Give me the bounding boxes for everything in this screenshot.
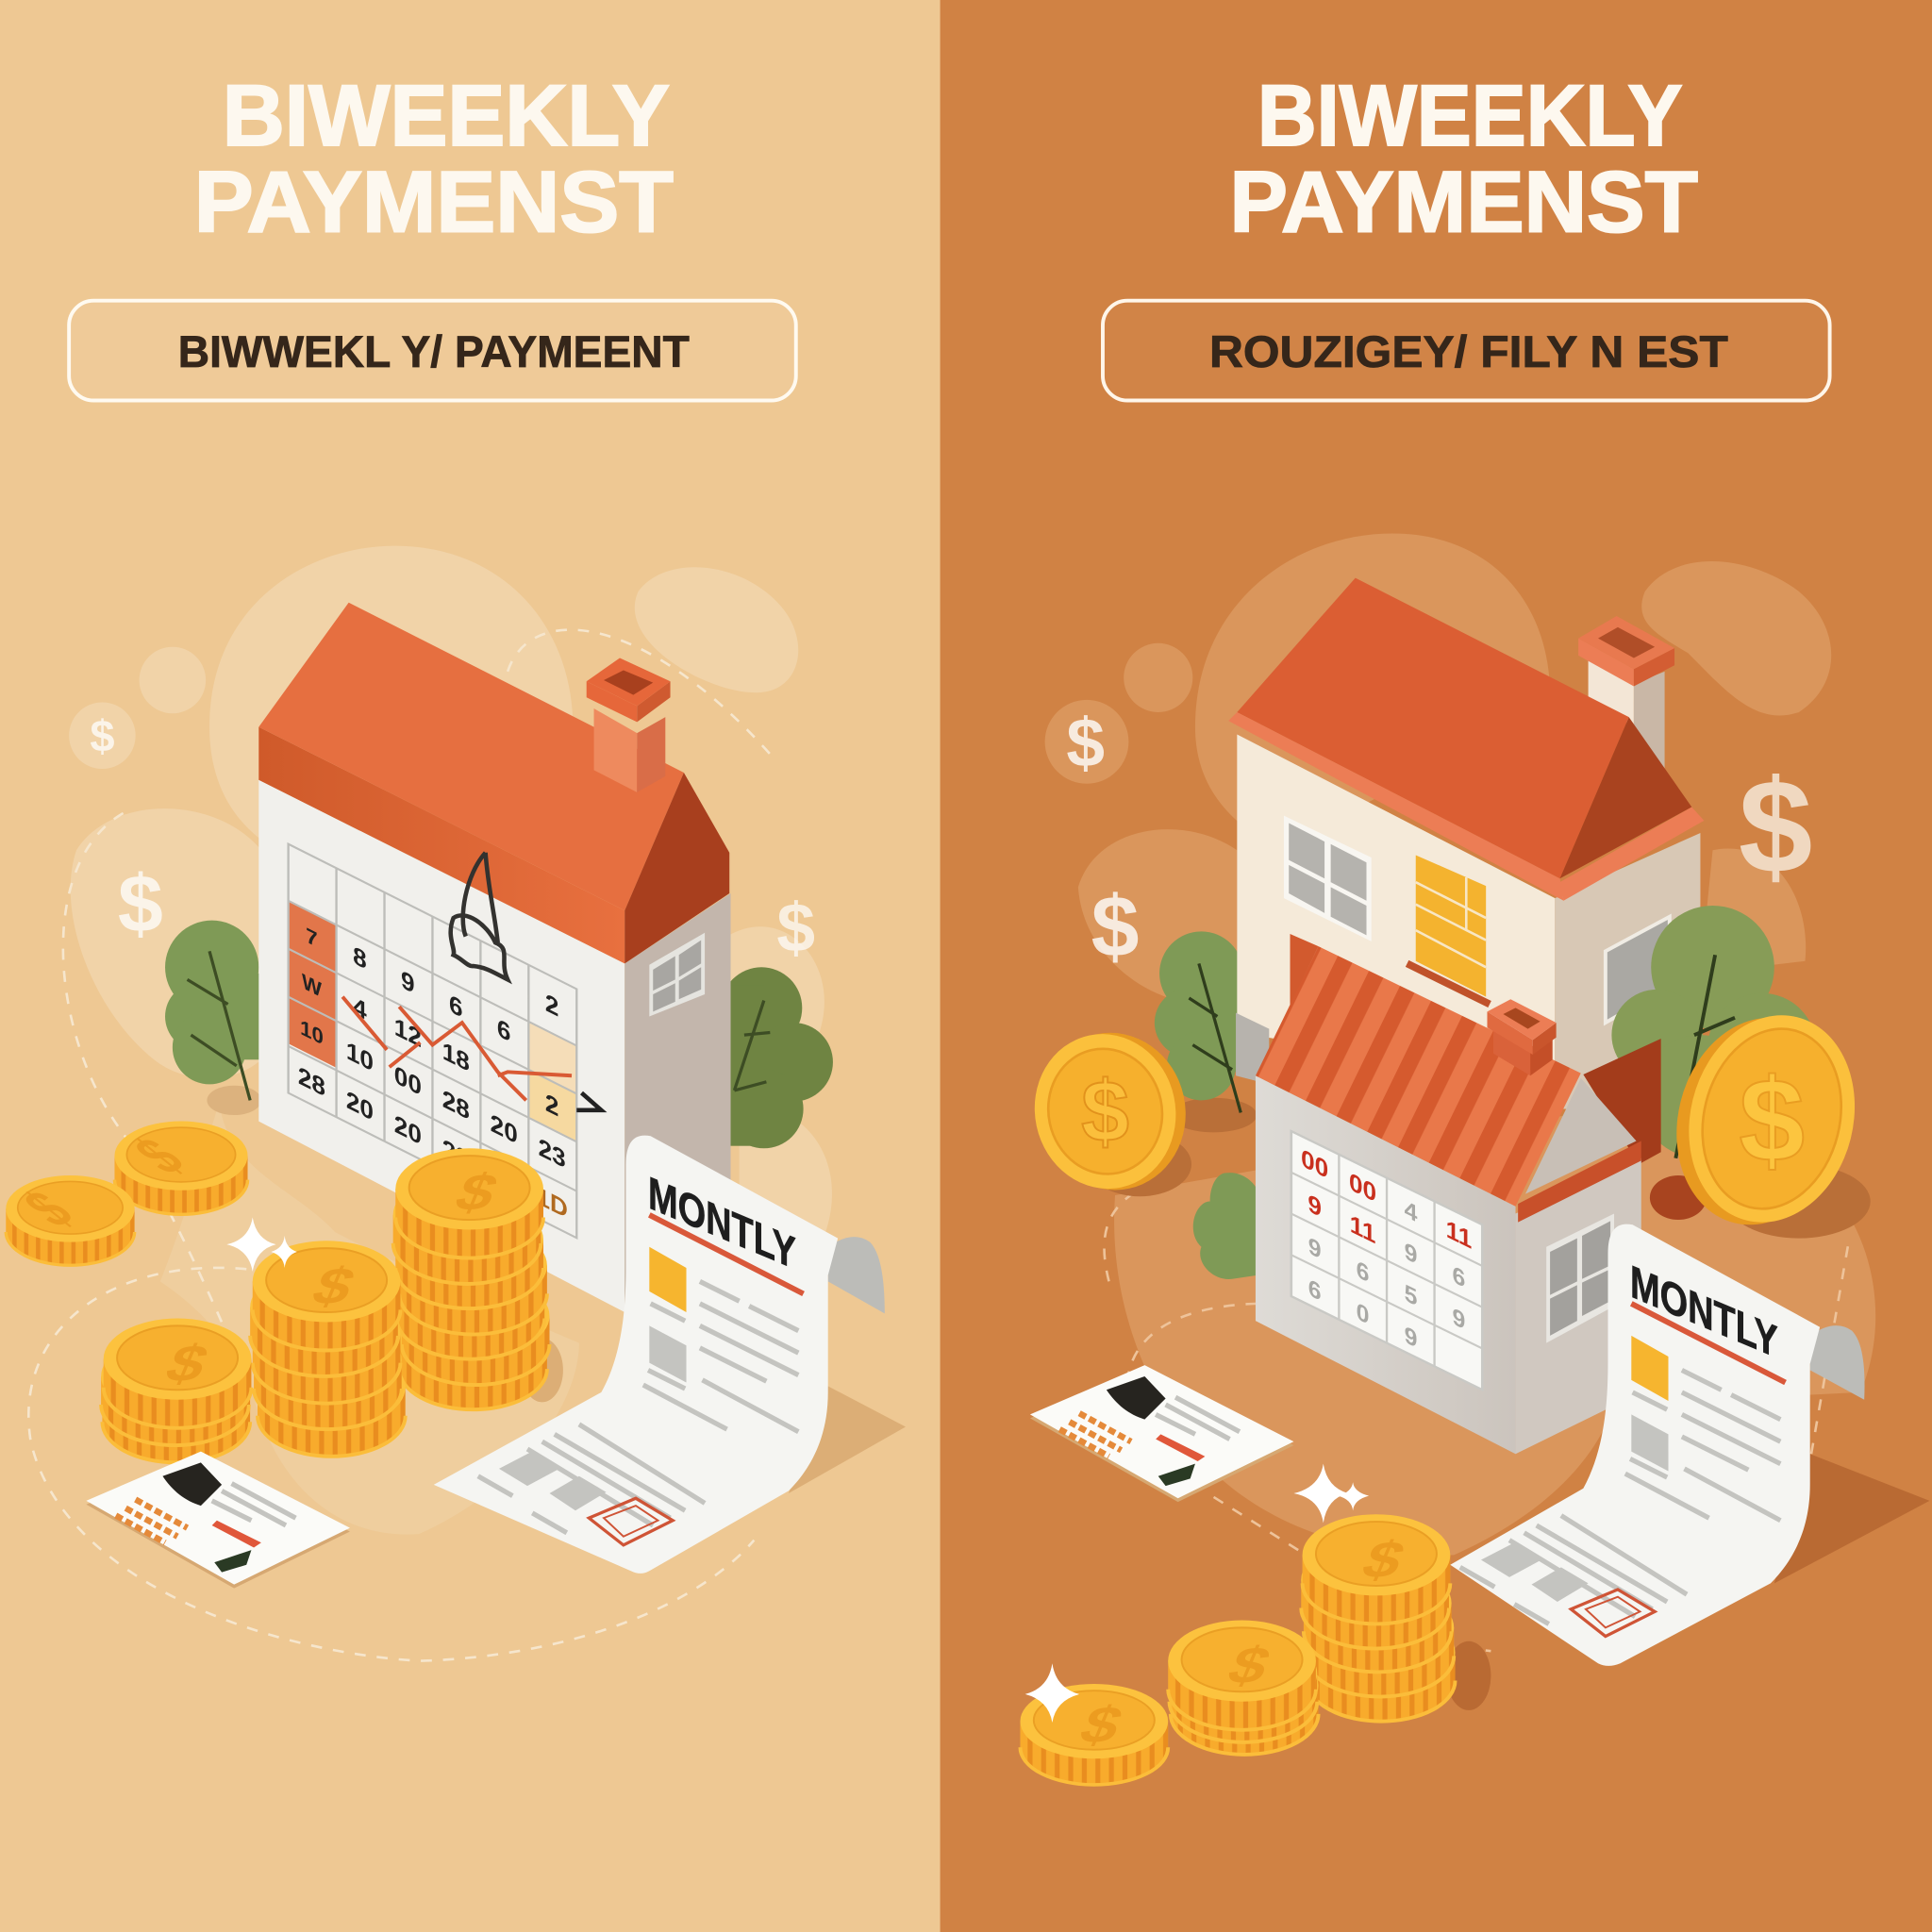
left tree: [165, 921, 261, 1115]
calendar grid: 6: [1357, 1255, 1369, 1288]
calendar grid: 11: [1350, 1209, 1375, 1249]
side window: [1606, 917, 1670, 1023]
label pill: BIWWEKL Y/ PAYMEENT: [178, 326, 690, 376]
calendar grid: 0: [1357, 1297, 1369, 1330]
calendar grid: 4: [1405, 1194, 1418, 1228]
coin stack medium: [250, 1241, 406, 1457]
standing coin left: $: [1081, 1063, 1129, 1159]
calendar grid: 9: [1405, 1237, 1417, 1270]
single coin left: [114, 1122, 248, 1215]
house walls: [1237, 734, 1555, 1084]
chimney: [1578, 616, 1674, 770]
calendar grid: 10: [346, 1036, 374, 1077]
calendar grid: 12: [394, 1012, 422, 1053]
coin stack short: $: [158, 1335, 217, 1392]
calendar grid: 2: [545, 988, 558, 1023]
lower calendar house: [1256, 934, 1661, 1454]
coin stack tall: [1301, 1514, 1456, 1723]
roof: [1228, 578, 1704, 901]
single coin left: $: [119, 1126, 199, 1185]
title: [1230, 68, 1698, 251]
icon: floating dollars: $: [1739, 752, 1812, 901]
calendar grid: 9: [1308, 1231, 1322, 1264]
coin shadows: [521, 1338, 563, 1402]
sparkles: [1025, 1464, 1369, 1723]
calendar grid: 9: [1307, 1189, 1322, 1223]
gable fascia: [1518, 1141, 1641, 1223]
standing coin right: $: [1739, 1053, 1805, 1186]
coin stack short: $: [1220, 1637, 1279, 1694]
calendar grid: 28: [442, 1084, 470, 1125]
panel: left biweekly: [0, 0, 941, 1932]
standing coin right: [1656, 997, 1876, 1242]
standing coin left: [1021, 1019, 1200, 1204]
right background blobs: [1045, 534, 1875, 1555]
roof: [258, 603, 729, 963]
single coin: [1020, 1684, 1168, 1786]
gable: [1525, 1078, 1637, 1194]
calendar grid: [1291, 1131, 1482, 1390]
left background blobs: [69, 546, 832, 1535]
arrow: [576, 1093, 601, 1110]
small tree: [1193, 1173, 1257, 1279]
title: BIWEEKLY: [223, 68, 670, 164]
side window: [649, 933, 705, 1017]
house walls: [258, 780, 625, 1312]
calendar grid: 23: [539, 1132, 566, 1174]
icon: floating dollars: $: [1066, 705, 1105, 781]
big tree: [1611, 906, 1816, 1158]
title: PAYMENST: [194, 155, 674, 251]
calendar grid: 1D: [536, 1180, 568, 1224]
single coin far left: [6, 1175, 135, 1266]
coin stack short: [1168, 1621, 1319, 1756]
small bill card: [1030, 1365, 1293, 1502]
calendar grid: 2: [545, 1088, 558, 1123]
calendar grid: 20: [346, 1085, 374, 1126]
calendar grid: 00: [394, 1059, 422, 1101]
red back wall: [1291, 934, 1319, 1010]
panel: right monthly: [941, 0, 1932, 1932]
small bill card: [86, 1452, 350, 1589]
coin stack tall: [393, 1148, 550, 1411]
calendar grid: 20: [394, 1109, 422, 1151]
label pill: ROUZIGEY/ FILY N EST: [1209, 326, 1728, 376]
coin stack short: [101, 1319, 251, 1464]
right dashed paths: [1105, 1189, 1848, 1657]
payment document: MONTLY: [1630, 1255, 1778, 1368]
calendar grid: 5: [1405, 1278, 1417, 1311]
striped roof: [1256, 946, 1581, 1207]
sparkles: [226, 1217, 297, 1272]
calendar grid: 23: [442, 1133, 470, 1174]
calendar grid: 8: [353, 941, 367, 975]
icon: floating dollars: [1066, 705, 1812, 975]
icon: floating dollars: $: [90, 711, 114, 761]
calendar grid: 00: [1301, 1143, 1328, 1184]
right background: [941, 0, 1932, 1932]
coin stack tall: $: [447, 1163, 507, 1222]
calendar grid: 6: [449, 989, 463, 1024]
title: PAYMENST: [1230, 155, 1698, 251]
calendar grid: 28: [298, 1060, 325, 1102]
calendar grid: 9: [401, 965, 415, 999]
calendar grid: 20: [491, 1108, 518, 1150]
calendar grid: W: [302, 969, 323, 1002]
trend line: [342, 997, 572, 1100]
left tree: [1155, 931, 1257, 1132]
calendar grid: 9: [1453, 1302, 1465, 1335]
payment document: [1450, 1224, 1929, 1666]
calendar grid: 10: [300, 1015, 324, 1050]
icon: floating dollars: $: [118, 858, 163, 949]
title: BIWEEKLY: [1257, 68, 1683, 164]
house walls: [1256, 1075, 1516, 1454]
icon: floating dollars: [90, 711, 815, 966]
calendar house: [258, 603, 731, 1312]
payment document: [434, 1136, 906, 1574]
icon: floating dollars: $: [1091, 879, 1139, 975]
upper house: [1228, 578, 1704, 1109]
yellow window: [1407, 855, 1490, 1004]
calendar grid: 4: [353, 991, 367, 1025]
bell hook: [451, 853, 508, 979]
label pill: [69, 301, 796, 400]
window: [1284, 816, 1372, 941]
title: [194, 68, 674, 251]
left dashed paths: [28, 630, 770, 1661]
coin stack tall: $: [1354, 1530, 1414, 1589]
calendar grid: [289, 844, 576, 1238]
calendar grid: 00: [1349, 1167, 1376, 1208]
calendar grid: 11: [1446, 1214, 1472, 1255]
coin shadow: [1446, 1641, 1491, 1710]
calendar grid: 18: [442, 1036, 470, 1077]
right tree: [721, 967, 833, 1148]
brick pile: [1650, 1175, 1707, 1220]
calendar grid: 6: [1453, 1260, 1465, 1293]
left background: [0, 0, 941, 1932]
calendar grid: 6: [1308, 1274, 1322, 1307]
calendar grid: 7: [306, 923, 318, 952]
calendar grid: 6: [497, 1013, 510, 1047]
payment document: MONTLY: [648, 1166, 796, 1279]
coin stack medium: $: [304, 1257, 364, 1315]
single coin far left: $: [8, 1179, 88, 1238]
chimney: [587, 658, 671, 792]
single coin: $: [1072, 1695, 1131, 1754]
icon: floating dollars: $: [776, 890, 815, 966]
side window: [1546, 1214, 1614, 1343]
calendar grid: 9: [1405, 1321, 1417, 1354]
lower chimney: [1487, 999, 1557, 1075]
label pill: [1103, 301, 1830, 400]
